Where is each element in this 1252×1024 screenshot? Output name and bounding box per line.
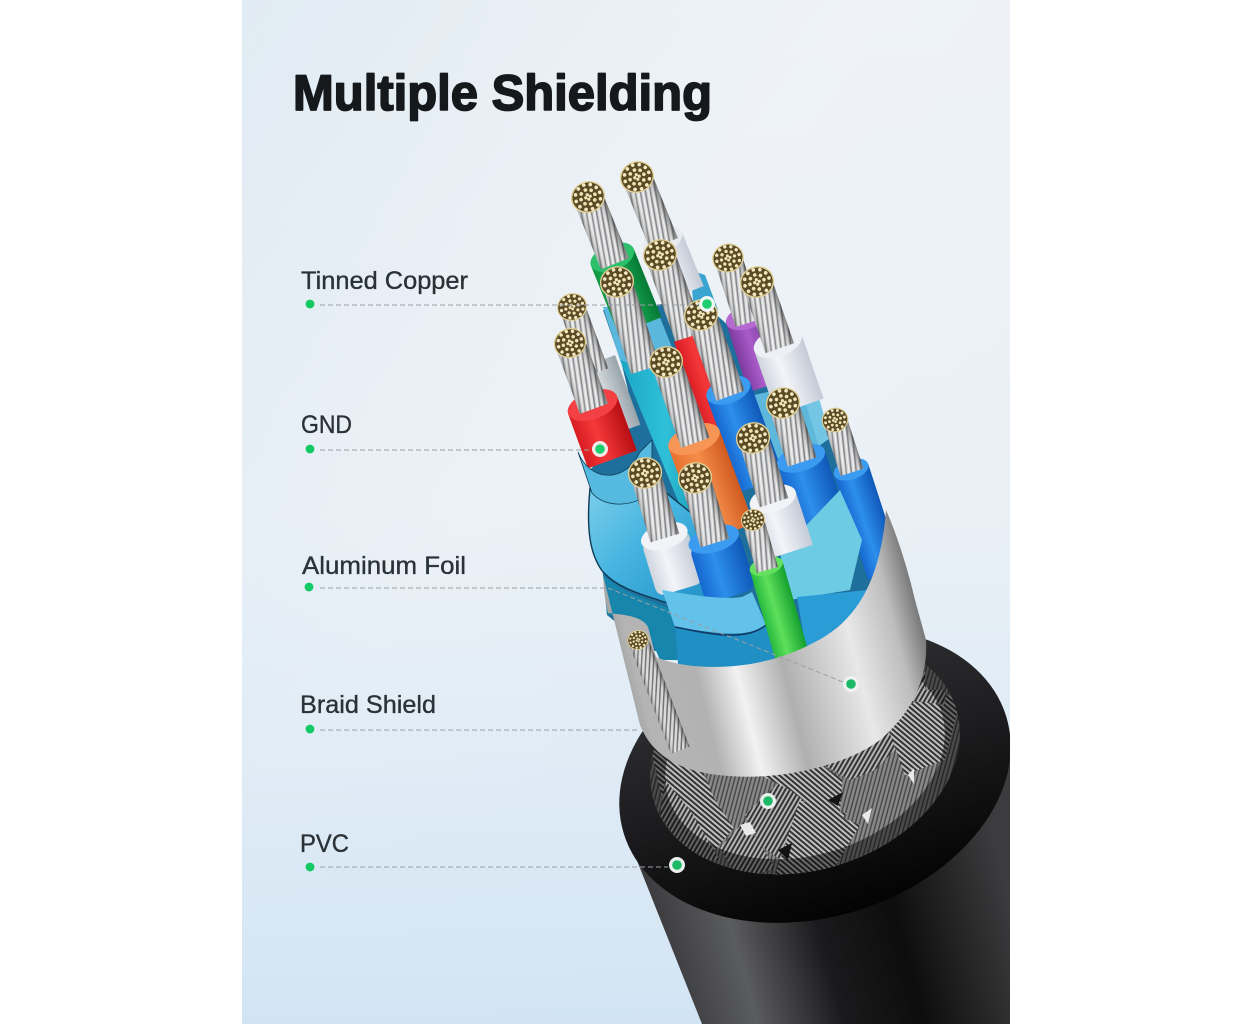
foil: red wire collar [578,440,652,504]
wire: red, back [674,336,718,427]
label: Aluminum Foil: Aluminum Foil [302,552,466,580]
label: GND [301,411,608,457]
label: Tinned Copper: Tinned Copper [301,267,468,295]
braid shield [650,664,960,874]
foil: fold under wrap [603,574,680,660]
aluminium foil sleeve [603,510,926,777]
wire: blue, centre [684,299,778,492]
wire: orange [648,346,748,530]
wire: blue, right upper [766,387,838,525]
wire: white, front centre [736,422,813,557]
wire: grey, left back [557,293,640,429]
drain wire [625,628,690,754]
wire: blue, front [678,462,754,598]
label: Braid Shield [300,691,776,809]
foil: lower left wrap [588,487,704,603]
PVC end face [619,639,1010,923]
wire: white, right [740,266,824,407]
wire: bare strand, back centre [642,239,693,342]
wire: blue, far right [822,408,886,580]
cable illustration [554,161,1010,1024]
foil: front bands [662,590,868,669]
label: PVC [300,830,685,873]
wire: white, front left [628,457,700,595]
PVC jacket body [628,760,1010,1024]
foil wrap: back layers [603,270,830,470]
label: GND: GND [301,411,352,439]
label: Tinned Copper [301,267,715,312]
wire: green, front [741,508,807,658]
foil: right front wrap [780,490,862,600]
wire: purple [712,243,766,391]
wire: teal bare strand [600,266,655,374]
label: Braid Shield: Braid Shield [300,691,436,719]
panel background [242,0,1010,1024]
label: Aluminum Foil [302,552,859,692]
label: PVC: PVC [300,830,349,858]
foil: teal strip [620,360,690,510]
title: Multiple Shielding [293,65,712,121]
wire: green [571,181,662,330]
inner cavity [590,300,895,670]
wire: red [554,328,637,468]
wire: white, back [620,161,704,292]
